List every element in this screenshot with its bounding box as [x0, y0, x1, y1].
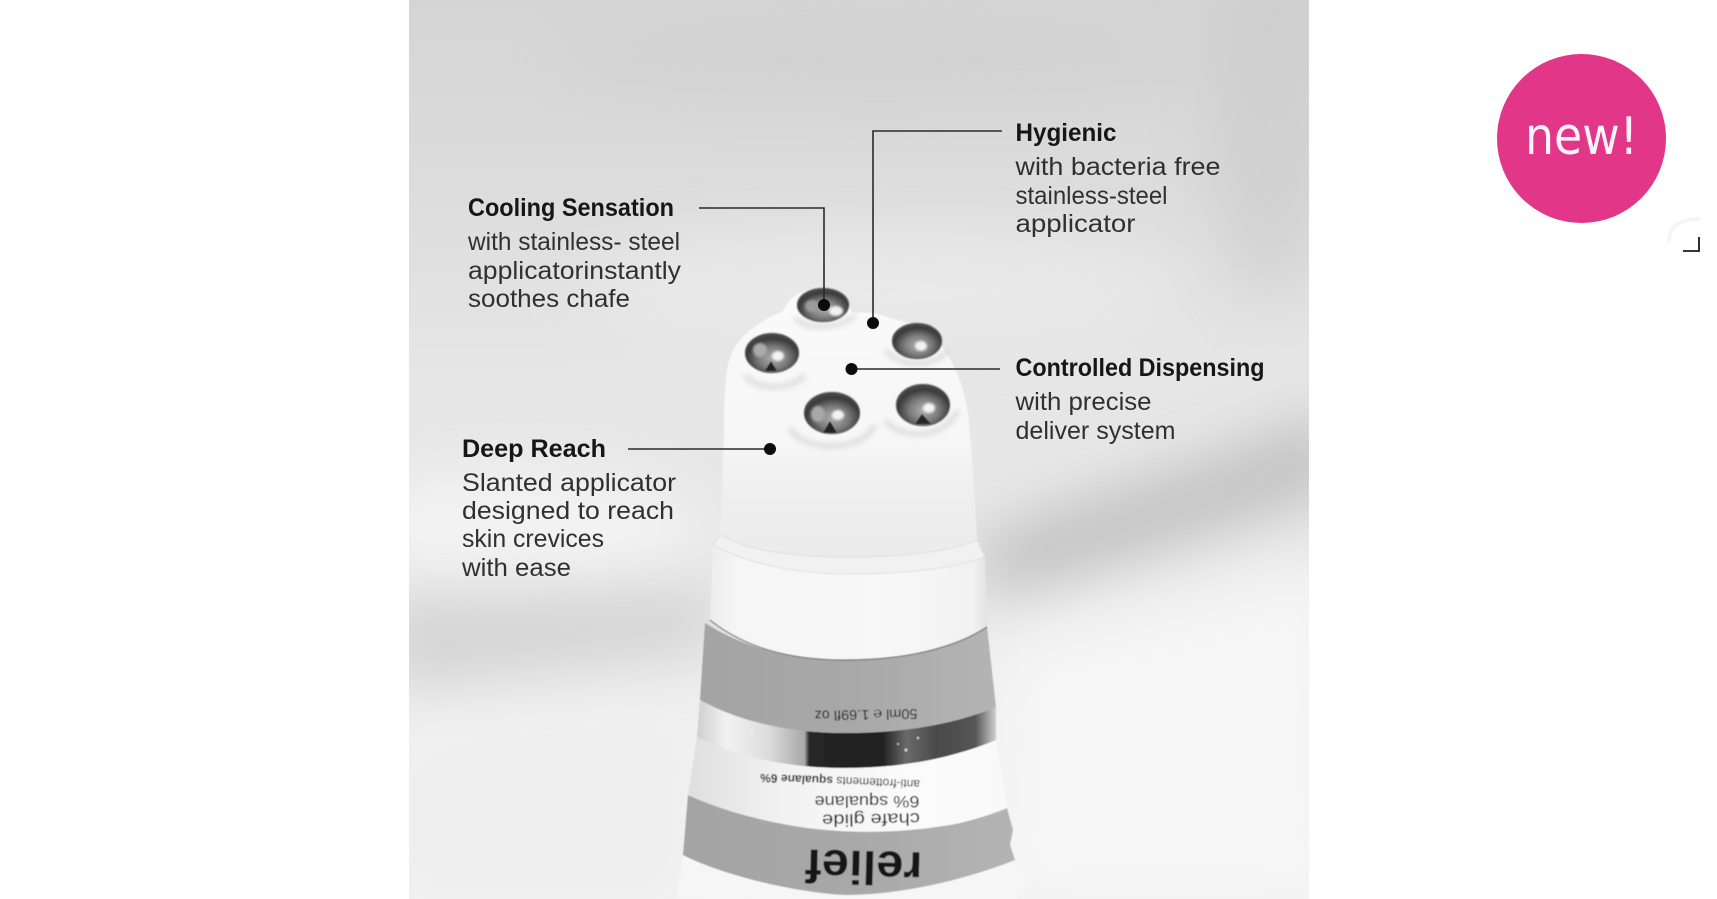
white collar	[710, 545, 987, 660]
tube printed descriptor text: anti-frottements squalane 6%	[759, 771, 920, 791]
callout: Controlled Dispensing: Controlled Dispensing	[1016, 354, 1264, 382]
callout: Cooling Sensation	[467, 194, 830, 313]
infographic canvas	[409, 0, 1700, 899]
icon: corner resize mark	[1669, 219, 1700, 251]
panel: product photo background	[340, 0, 1340, 899]
badge: new!	[1497, 54, 1666, 223]
callout: Cooling Sensation: Cooling Sensation	[468, 194, 674, 222]
ring under neck	[716, 540, 984, 574]
tube lower grey band	[683, 795, 1015, 895]
callout: Controlled Dispensing: with precise	[1014, 388, 1152, 416]
callout: Cooling Sensation: soothes chafe	[468, 285, 630, 313]
metallic silver strip	[697, 700, 996, 768]
product tube	[677, 288, 1030, 899]
callout: Cooling Sensation: with stainless- steel	[467, 228, 680, 256]
badge: new!: new!	[1525, 107, 1638, 167]
tube white label band	[688, 737, 1007, 832]
callout: Deep Reach: skin crevices	[462, 525, 604, 553]
applicator socket shading	[745, 315, 958, 446]
callout: Deep Reach: with ease	[461, 554, 571, 582]
tube printed concentration text: 6% squalane	[814, 792, 920, 811]
tube printed product name: chafe glide	[822, 809, 920, 830]
tube printed brand name: relief	[804, 839, 923, 896]
callout: Hygienic: Hygienic	[1016, 119, 1117, 147]
callout: Hygienic: stainless-steel	[1016, 182, 1168, 210]
steel ball: top	[797, 288, 849, 322]
callout: Controlled Dispensing	[846, 354, 1264, 445]
callout: Hygienic: with bacteria free	[1014, 153, 1220, 181]
callout: Deep Reach: Deep Reach	[462, 435, 606, 463]
steel ball: right	[892, 323, 942, 359]
water droplets on tube	[751, 732, 920, 752]
callout: Controlled Dispensing: deliver system	[1016, 417, 1176, 445]
tube printed volume text: 50ml ℮ 1.69fl oz	[814, 706, 918, 724]
applicator neck and dome	[720, 288, 977, 557]
tube lower white body	[677, 855, 1030, 899]
callout: Deep Reach	[461, 435, 776, 582]
callout: Hygienic	[867, 119, 1220, 329]
steel ball: front centre	[804, 392, 860, 434]
callout: Hygienic: applicator	[1016, 210, 1136, 238]
tube upper grey band	[700, 623, 996, 733]
callout: Deep Reach: Slanted applicator	[462, 469, 676, 497]
steel ball: front right	[896, 384, 950, 426]
callout: Deep Reach: designed to reach	[462, 497, 674, 525]
callout: Cooling Sensation: applicatorinstantly	[468, 257, 682, 285]
steel ball: left	[745, 333, 799, 373]
